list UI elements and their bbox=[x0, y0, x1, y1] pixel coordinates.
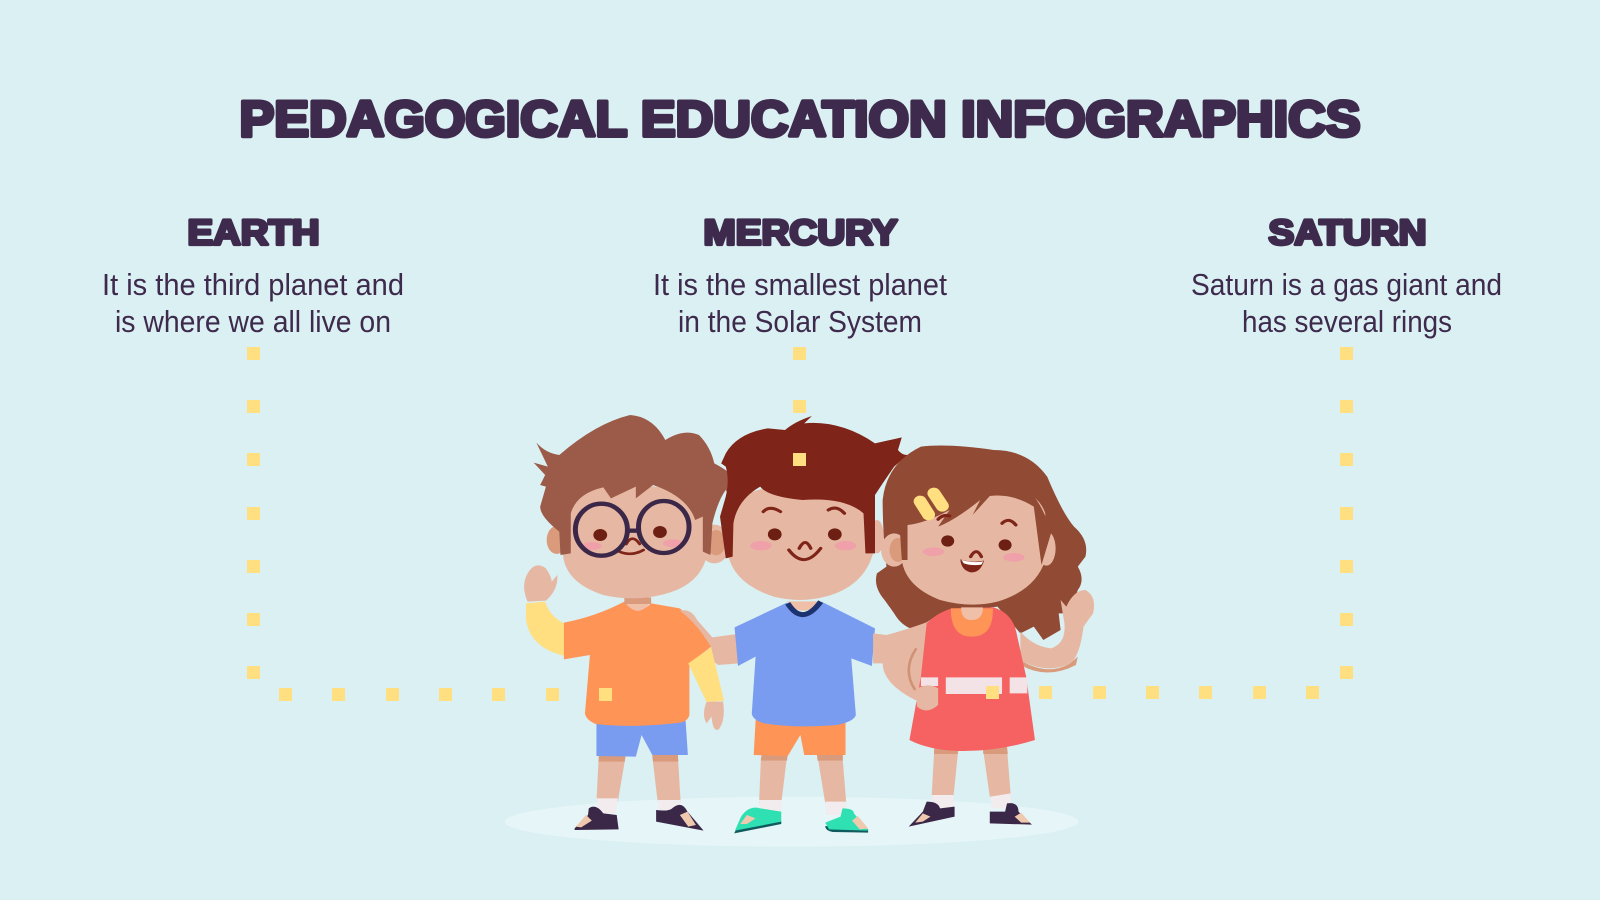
text block: earth description: It is the third planet and bbox=[102, 267, 404, 302]
title: PEDAGOGICAL EDUCATION INFOGRAPHICS bbox=[240, 91, 1360, 147]
panel: saturn bbox=[1191, 214, 1502, 339]
ground shadow bbox=[505, 797, 1079, 847]
heading: earth: EARTH bbox=[188, 214, 320, 252]
connector: earth dotted line bbox=[247, 347, 612, 701]
connector: mercury dotted line bbox=[793, 347, 806, 466]
text block: saturn description: Saturn is a gas giant and bbox=[1191, 267, 1502, 302]
panel: mercury bbox=[653, 214, 947, 339]
illustration: three children bbox=[505, 415, 1094, 847]
icon: hair clip bbox=[920, 493, 942, 515]
text block: earth description: is where we all live on bbox=[115, 304, 391, 339]
heading: saturn: SATURN bbox=[1268, 214, 1426, 252]
connector: saturn dotted line bbox=[986, 347, 1353, 699]
character: boy with glasses bbox=[524, 415, 736, 831]
text block: mercury description: It is the smallest planet bbox=[653, 267, 947, 302]
heading: mercury: MERCURY bbox=[704, 214, 898, 252]
panel: earth bbox=[102, 214, 404, 339]
character: boy in blue shirt bbox=[680, 416, 908, 833]
text block: saturn description bbox=[1191, 267, 1502, 339]
text block: earth description bbox=[102, 267, 404, 339]
text block: saturn description: has several rings bbox=[1242, 304, 1452, 339]
text block: mercury description: in the Solar System bbox=[678, 304, 922, 339]
character: girl in red dress bbox=[873, 446, 1094, 827]
icon: glasses bbox=[575, 501, 689, 556]
text block: mercury description bbox=[653, 267, 947, 339]
